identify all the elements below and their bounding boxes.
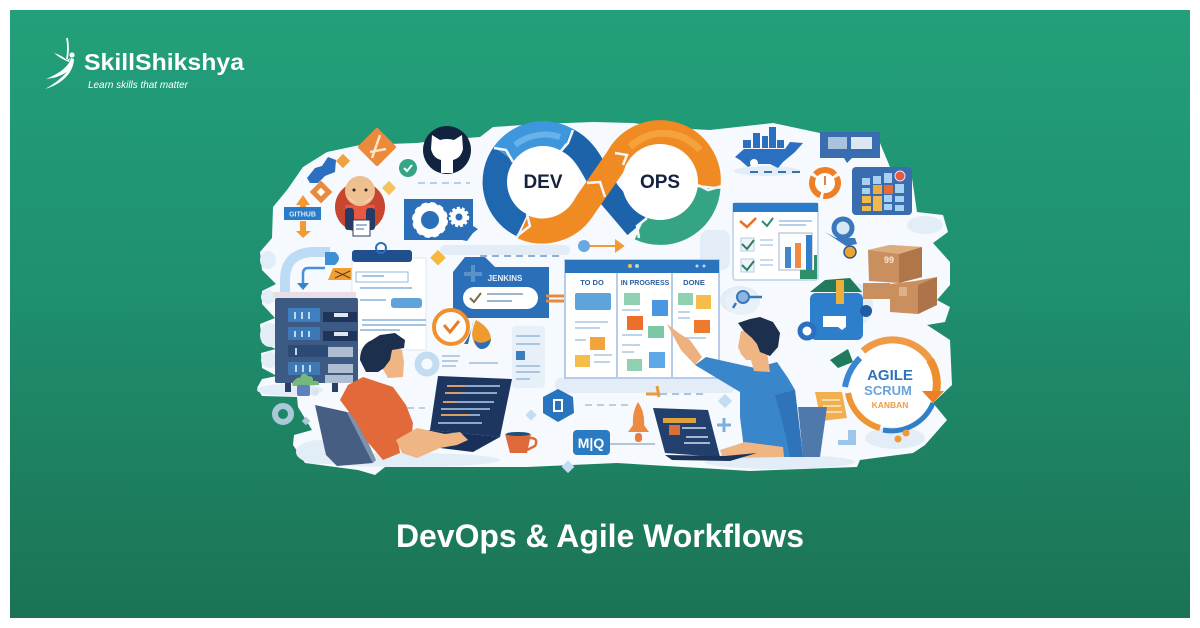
icon: blue hexagon connector (543, 389, 574, 422)
icon: gear on green (275, 406, 291, 422)
agile scrum kanban cycle (845, 340, 944, 431)
ring: orange crossover (523, 133, 708, 231)
laptop base (417, 430, 500, 452)
dark green accent (830, 349, 853, 368)
ring: light blue top arc (504, 134, 567, 154)
cycle: top orange arc (863, 340, 933, 365)
DEV label: DEV (523, 172, 563, 193)
icon: jenkins mascot (335, 176, 385, 236)
icon: blue and orange bulb (464, 318, 491, 349)
dashboard window (733, 203, 818, 280)
icon: magnifier and lock (825, 219, 857, 258)
cycle: right orange arc and arrow (930, 360, 937, 392)
server rack (273, 292, 358, 392)
agile scrum kanban cycle: AGILE (867, 367, 913, 384)
docker whale (735, 127, 803, 172)
ring highlights (630, 133, 700, 150)
text lines near person (442, 356, 498, 366)
title: DevOps & Agile Workflows (396, 518, 804, 554)
icon: orange diamond git (357, 127, 397, 167)
chair (798, 407, 827, 457)
logo (45, 38, 245, 91)
check marks (740, 218, 756, 227)
kanban board (565, 260, 719, 378)
infinity loop DEV OPS (494, 130, 722, 238)
white cloud backdrop (257, 122, 952, 475)
ring: dark blue left arc (495, 154, 522, 225)
small orange diamonds (310, 154, 446, 265)
hair (360, 333, 405, 372)
chat panel (820, 132, 880, 163)
cardboard boxes (863, 245, 937, 314)
ring: dark blue crossover (567, 140, 637, 227)
sticky note (815, 392, 847, 421)
coffee mug (505, 432, 536, 453)
kanban board: IN PROGRESS (621, 280, 670, 287)
MQ tile: M|Q (578, 435, 604, 451)
icon: logo figure (45, 38, 75, 89)
icon: connector node (578, 240, 590, 252)
jenkins panel (453, 257, 549, 318)
forearm and hand (396, 428, 468, 458)
small document panel (512, 326, 545, 388)
DEV hub (507, 146, 579, 218)
cardboard boxes: 99 (884, 255, 894, 265)
icon: key (725, 289, 762, 315)
neck and face (380, 342, 404, 378)
jenkins status pill (463, 287, 538, 309)
cycle: bottom blue arc (883, 403, 933, 431)
cycle: left blue arc (845, 358, 860, 387)
logo wordmark: SkillShikshya (84, 49, 245, 75)
agile scrum kanban cycle: KANBAN (872, 400, 908, 410)
icon: pale gear (418, 355, 436, 373)
bar chart (779, 233, 812, 270)
flow arrow (585, 241, 623, 251)
pale blue backdrop wash (257, 166, 943, 469)
deploy pipeline arrow (285, 252, 357, 292)
laptop screen (430, 376, 512, 437)
icon: green check (399, 159, 417, 177)
orange connector bars (546, 296, 565, 301)
icon: clock with check (434, 310, 468, 344)
agile scrum kanban cycle: SCRUM (864, 383, 912, 398)
left developer (315, 333, 512, 466)
icon: orange rocket (628, 402, 649, 442)
OPS hub (622, 144, 698, 220)
GITHUB tag with arrows: GITHUB (289, 212, 316, 218)
neck and face (738, 330, 770, 372)
icon: blue puzzle (307, 157, 336, 183)
small blue plus (717, 418, 731, 432)
ring: green arc (640, 188, 708, 232)
ring segment chevrons (494, 130, 722, 238)
right laptop (653, 408, 757, 461)
hair (738, 317, 780, 356)
blue toolbox (800, 278, 872, 340)
icon: potted plant (292, 373, 319, 396)
card text lines (575, 310, 706, 362)
icon: blue package tree (838, 430, 856, 445)
right developer (667, 317, 827, 458)
cycle: lower left orange arc (848, 393, 880, 428)
MQ tile (573, 430, 610, 455)
OPS label: OPS (640, 172, 680, 193)
jenkins panel: JENKINS (488, 274, 523, 283)
forearm (720, 442, 784, 458)
column headings: TO DO (580, 278, 604, 287)
kanban cards (575, 293, 711, 371)
calendar grid panel (852, 167, 912, 215)
pointing hand and forearm (667, 324, 702, 365)
shirt and sleeve (695, 357, 803, 457)
gear panel (404, 199, 478, 241)
logo tagline: Learn skills that matter (88, 79, 188, 91)
small diamond markers (302, 394, 732, 473)
chair (315, 405, 373, 466)
GITHUB tag with arrows (284, 195, 321, 238)
dashed connectors (395, 183, 708, 408)
clipboard document (352, 243, 426, 350)
orange dots (894, 430, 910, 442)
kanban board: DONE (683, 278, 705, 287)
icon: orange clock (812, 170, 838, 196)
small orange pin with dashed line (646, 386, 660, 397)
shirt (340, 377, 413, 460)
bottom baseline stroke (610, 443, 655, 445)
icon: github (423, 126, 471, 174)
